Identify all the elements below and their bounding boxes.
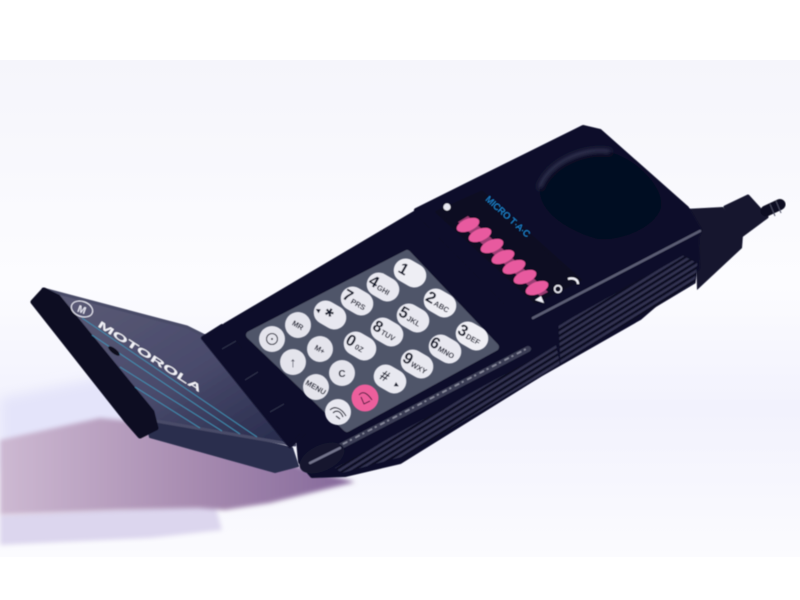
phone body (203, 127, 700, 480)
body base (225, 212, 698, 476)
key end (pink) (352, 384, 378, 412)
key 7: 7 (340, 287, 356, 306)
pink display segments (455, 215, 550, 298)
key 4: GHI (375, 283, 391, 297)
key 4: 4 (366, 273, 382, 292)
key hash: # (377, 367, 393, 386)
motorola logo (69, 298, 95, 320)
flip cover front edge (33, 290, 156, 436)
key 7: PRS (349, 297, 367, 312)
key 4 (362, 268, 404, 306)
key 6 (424, 330, 466, 368)
key 1 (389, 254, 431, 292)
display status icons (443, 203, 578, 303)
key arrow (280, 349, 306, 375)
key 6: MNO (436, 344, 456, 361)
key 2: 2 (423, 289, 439, 308)
flip cover blue lines (82, 318, 257, 437)
key 3: 3 (455, 322, 471, 341)
key power (259, 326, 285, 352)
module front highlight (533, 231, 700, 318)
ridge sparkle (310, 448, 340, 463)
keypad keys (259, 254, 493, 425)
antenna (685, 196, 781, 290)
lower grip hatch (335, 345, 560, 473)
key C: C (338, 369, 346, 380)
key 8 (366, 313, 408, 351)
key hash: ▸ (392, 379, 402, 390)
key MR (280, 307, 316, 343)
table shadow (0, 418, 355, 545)
key 3: DEF (464, 332, 482, 347)
antenna collar (725, 196, 767, 237)
key hash (369, 360, 411, 398)
key 5: JKL (405, 314, 422, 329)
key M+ (302, 331, 338, 367)
key 2: ABC (432, 299, 451, 315)
key 5 (392, 299, 434, 337)
key C (329, 360, 355, 386)
key 0 (339, 327, 381, 365)
flip cover underside edge (145, 415, 298, 472)
key 9: WXY (409, 360, 428, 376)
motorola logo: M (76, 304, 87, 317)
key 1: 1 (395, 260, 411, 279)
keypad panel (250, 254, 495, 428)
key menu: MENU (304, 378, 328, 397)
display window (437, 192, 580, 302)
key star: ◂ (313, 304, 323, 315)
key send (325, 399, 351, 425)
lower ridge highlight (318, 348, 528, 458)
key star (308, 296, 351, 336)
key 9: 9 (400, 350, 416, 369)
model label: MICRO T·A·C (484, 194, 533, 240)
top module (416, 127, 700, 327)
motorola wordmark: MOTOROLA (95, 319, 204, 395)
key 9 (396, 345, 438, 383)
antenna wedge (685, 207, 743, 290)
key M+: M+ (313, 343, 327, 356)
key 8: 8 (370, 318, 386, 337)
key menu (298, 369, 334, 405)
hinge cap (295, 436, 349, 480)
key 7 (336, 282, 378, 320)
key 8: TUV (379, 328, 397, 343)
key 6: 6 (427, 334, 443, 353)
earpiece (540, 151, 661, 239)
upper grip hatch (558, 255, 698, 364)
key 3 (451, 317, 493, 355)
key 0: 0 (343, 332, 359, 351)
flip cover inner surface (43, 289, 295, 445)
key MR: MR (290, 319, 306, 333)
flip cover (33, 289, 298, 472)
hinge (203, 326, 305, 446)
microphone slot (107, 345, 121, 357)
key 5: 5 (396, 304, 412, 323)
key 0: 0Z (353, 342, 365, 355)
key arrow: ↑ (290, 354, 296, 370)
key star: * (318, 302, 338, 329)
antenna tip (766, 201, 781, 216)
key 2 (419, 284, 461, 322)
